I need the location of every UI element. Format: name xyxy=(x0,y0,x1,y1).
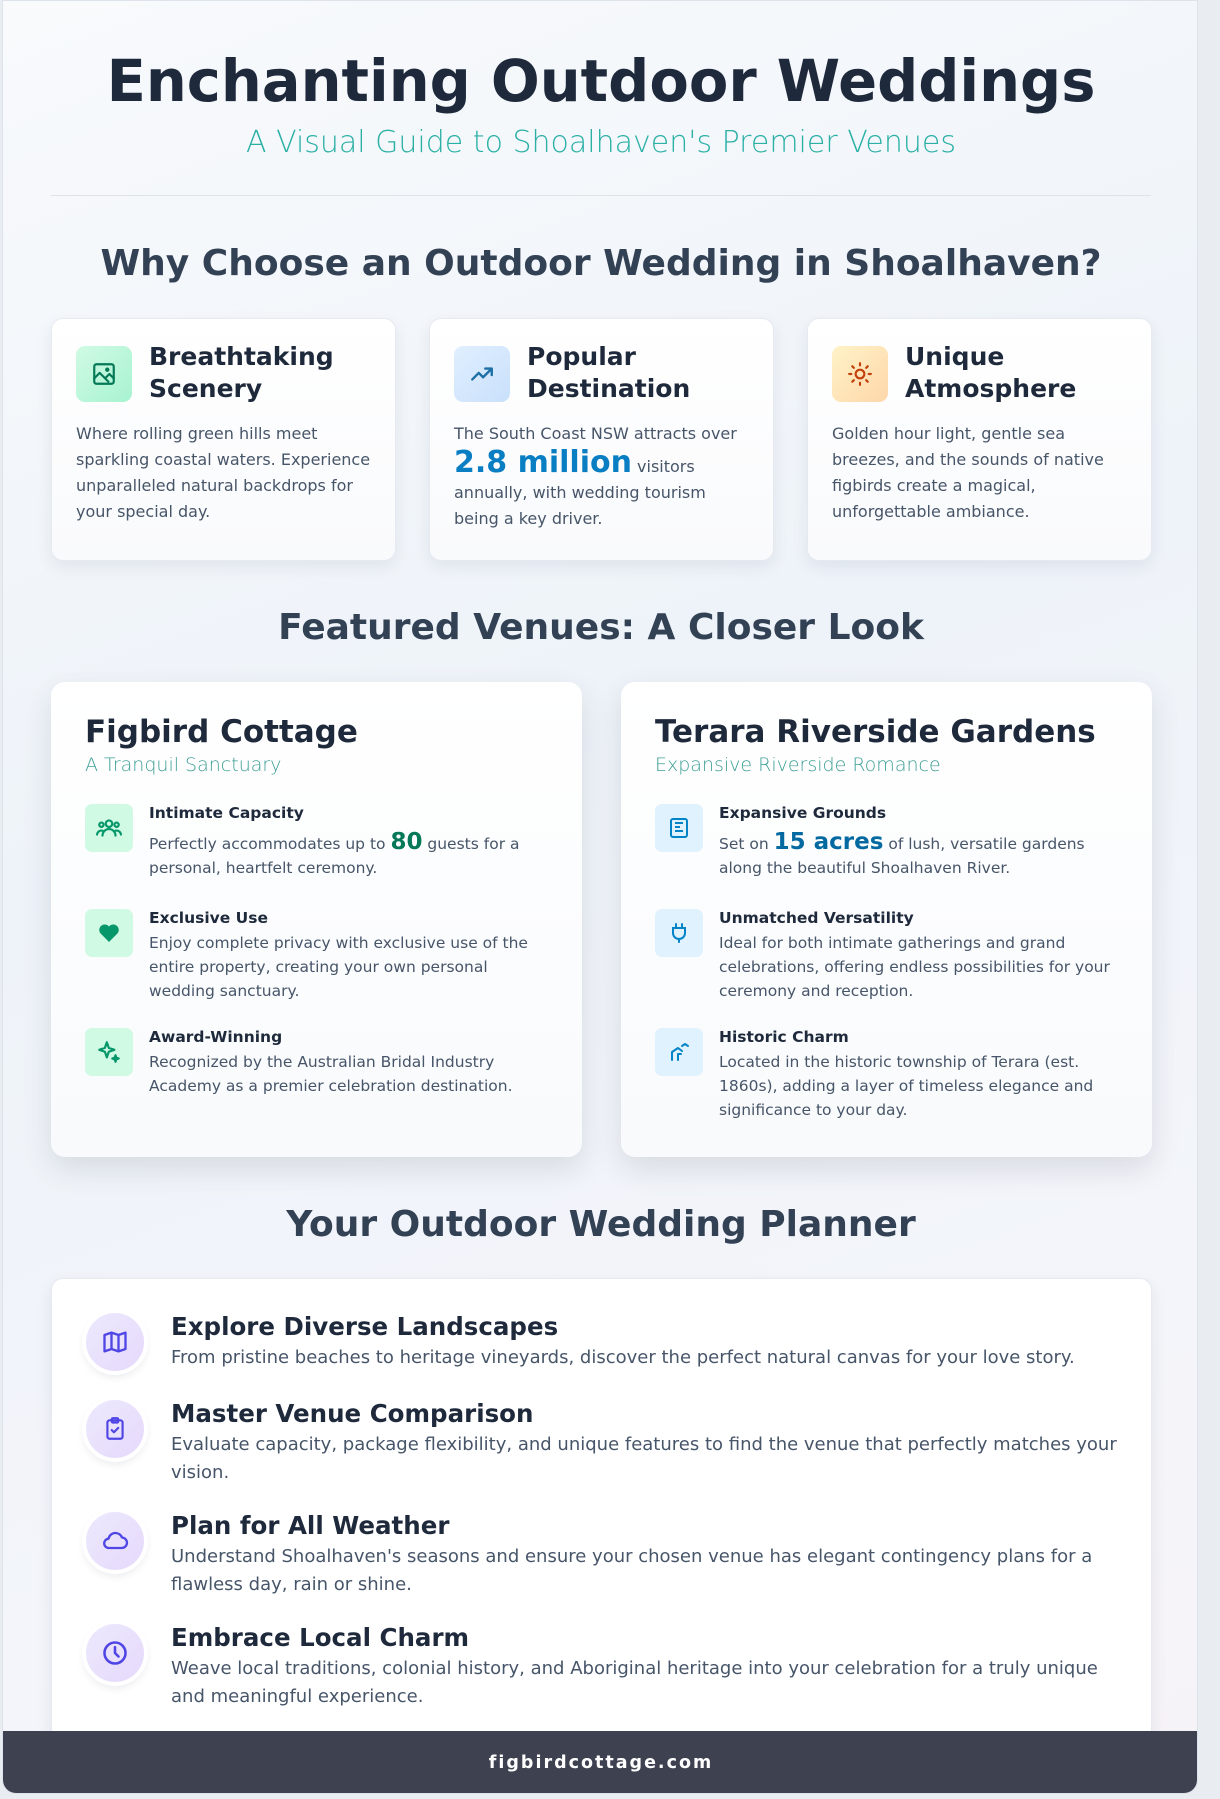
card text: The South Coast NSW attracts over 2.8 million visitors annually, with wedding tourism being a key driver. xyxy=(454,424,737,528)
panel: terara riverside gardens: Unmatched Versatility xyxy=(719,909,914,927)
panel: terara riverside gardens: Ideal for both intimate gatherings and grand celebrations, offering endless possibilities for your ceremony and reception. xyxy=(719,934,1110,1000)
panel: planner: Understand Shoalhaven's seasons and ensure your chosen venue has elegant contingency plans for a flawless day, rain or shine. xyxy=(171,1546,1092,1594)
heading: planner: Your Outdoor Wedding Planner xyxy=(286,1204,916,1245)
panel: terara riverside gardens xyxy=(621,682,1152,1157)
card heading: Breathtaking xyxy=(149,342,334,371)
panel: figbird cottage: Award-Winning xyxy=(149,1028,282,1046)
item: historic charm xyxy=(655,1028,1093,1119)
panel: figbird cottage: Exclusive Use xyxy=(149,909,268,927)
panel: planner: Embrace Local Charm xyxy=(171,1623,469,1652)
card text: Golden hour light, gentle sea breezes, and the sounds of native figbirds create a magical, unforgettable ambiance. xyxy=(832,424,1104,521)
title: Enchanting Outdoor Weddings xyxy=(107,48,1095,115)
card heading: Destination xyxy=(527,374,690,403)
panel: figbird cottage: Perfectly accommodates up to 80 guests for a personal, heartfelt ceremony. xyxy=(149,829,520,877)
panel: planner: From pristine beaches to heritage vineyards, discover the perfect natural canvas for your love story. xyxy=(171,1347,1075,1368)
footer xyxy=(3,1731,1199,1795)
subtitle: A Visual Guide to Shoalhaven's Premier Venues xyxy=(246,125,956,160)
card heading: Scenery xyxy=(149,374,262,403)
item: award-winning xyxy=(85,1028,513,1095)
venue title: Figbird Cottage xyxy=(85,714,358,750)
heading: why choose: Why Choose an Outdoor Wedding in Shoalhaven? xyxy=(100,243,1102,284)
panel: planner: Master Venue Comparison xyxy=(171,1399,533,1428)
venue subtitle: A Tranquil Sanctuary xyxy=(85,754,281,776)
panel: planner: Weave local traditions, colonial history, and Aboriginal heritage into your celebration for a truly unique and meaningful experience. xyxy=(171,1658,1098,1706)
panel: unique atmosphere xyxy=(807,318,1152,561)
panel: terara riverside gardens: Set on 15 acres of lush, versatile gardens along the beautiful Shoalhaven River. xyxy=(719,829,1085,877)
item: exclusive use xyxy=(85,909,528,1000)
venue subtitle: Expansive Riverside Romance xyxy=(655,754,941,776)
panel: figbird cottage: Recognized by the Australian Bridal Industry Academy as a premier celebration destination. xyxy=(149,1053,513,1095)
item: capacity xyxy=(85,804,520,877)
card text: Where rolling green hills meet sparkling coastal waters. Experience unparalleled natural backdrops for your special day. xyxy=(76,424,370,521)
panel: breathtaking scenery xyxy=(51,318,396,561)
panel: popular destination xyxy=(429,318,774,561)
step: comparison xyxy=(84,1399,1117,1482)
step: weather xyxy=(84,1511,1092,1594)
panel: terara riverside gardens: Expansive Grounds xyxy=(719,804,886,822)
icon: trend xyxy=(454,346,510,402)
panel: figbird cottage: Enjoy complete privacy with exclusive use of the entire property, creating your own personal wedding sanctuary. xyxy=(149,934,528,1000)
step: landscapes xyxy=(84,1312,1075,1378)
icon: image xyxy=(76,346,132,402)
panel: planner: Evaluate capacity, package flexibility, and unique features to find the venue that perfectly matches your vision. xyxy=(171,1434,1117,1482)
panel: figbird cottage: Intimate Capacity xyxy=(149,804,304,822)
card heading xyxy=(149,342,334,403)
card heading: Unique xyxy=(905,342,1004,371)
panel: terara riverside gardens: Historic Charm xyxy=(719,1028,849,1046)
item: grounds xyxy=(655,804,1085,877)
footer: figbirdcottage.com xyxy=(489,1753,713,1773)
panel: planner: Explore Diverse Landscapes xyxy=(171,1312,558,1341)
card heading: Popular xyxy=(527,342,636,371)
panel: figbird cottage xyxy=(51,682,582,1157)
step: local charm xyxy=(84,1623,1098,1706)
item: versatility xyxy=(655,909,1110,1000)
card heading xyxy=(905,342,1076,403)
heading: featured venues: Featured Venues: A Closer Look xyxy=(278,607,924,648)
card heading: Atmosphere xyxy=(905,374,1076,403)
panel: terara riverside gardens: Located in the historic township of Terara (est. 1860s), adding a layer of timeless elegance and significance to your day. xyxy=(719,1053,1093,1119)
card heading xyxy=(527,342,690,403)
venue title: Terara Riverside Gardens xyxy=(655,714,1096,750)
panel: planner xyxy=(51,1278,1152,1758)
panel: planner: Plan for All Weather xyxy=(171,1511,449,1540)
icon: sun xyxy=(832,346,888,402)
